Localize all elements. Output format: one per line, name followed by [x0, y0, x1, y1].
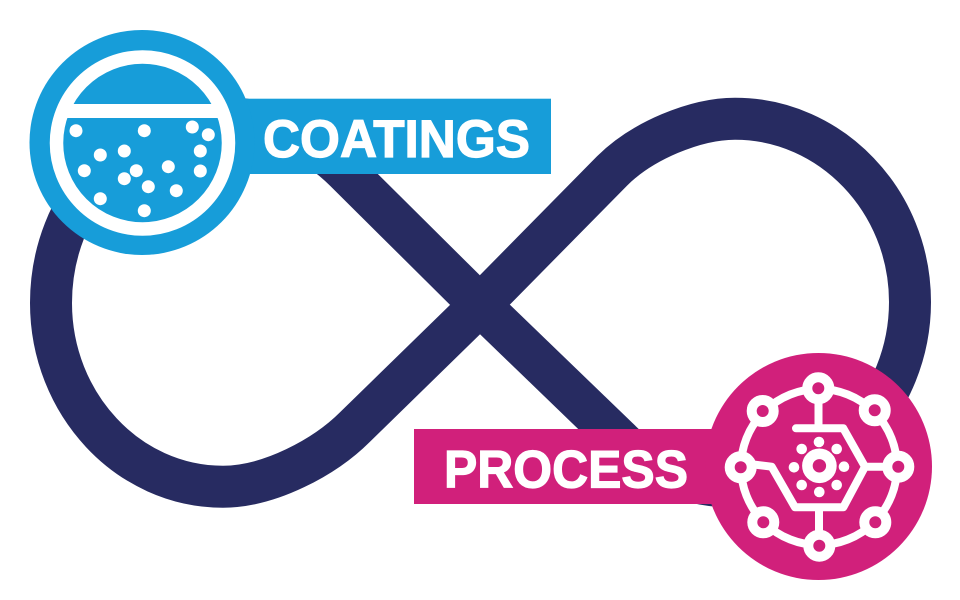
process banner: [414, 429, 734, 504]
process badge: [414, 353, 932, 580]
infinity loop: [51, 118, 910, 487]
process label: PROCESS: [444, 440, 688, 500]
icon: process network: [730, 377, 909, 557]
icon: coating beaker: [56, 57, 228, 229]
process circle: [705, 353, 932, 580]
coatings label: COATINGS: [263, 110, 530, 169]
coatings circle: [30, 30, 254, 255]
coatings badge: [30, 30, 551, 255]
particles: [70, 120, 215, 217]
central hub: [789, 437, 849, 497]
coatings banner: [230, 99, 551, 174]
network nodes: [730, 377, 909, 557]
